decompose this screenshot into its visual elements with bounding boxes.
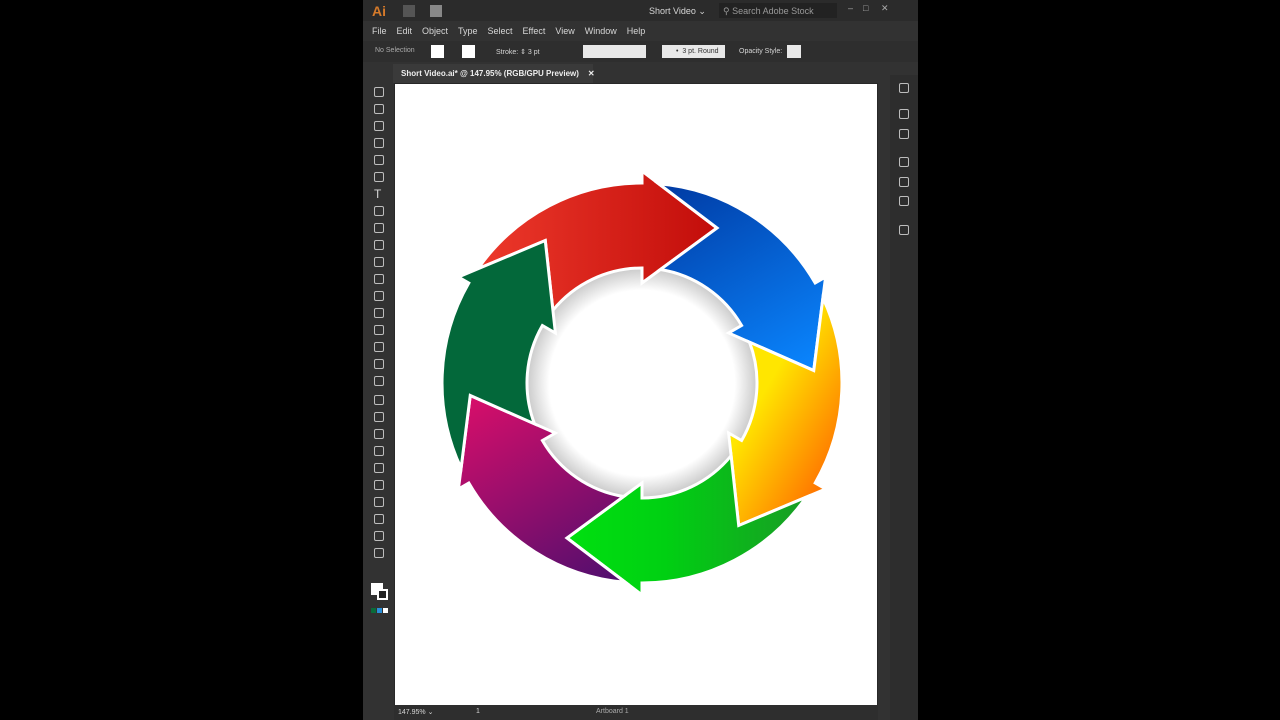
status bar	[394, 705, 878, 720]
artboard	[395, 84, 877, 705]
toolbar	[371, 87, 388, 613]
toolbar: T	[374, 187, 381, 201]
arrow: orange	[667, 277, 908, 554]
title bar	[363, 0, 918, 21]
title bar: Ai	[372, 3, 386, 19]
status bar: Artboard 1	[596, 708, 629, 715]
control bar: No Selection	[375, 47, 415, 54]
canvas area	[394, 83, 878, 705]
document tab	[393, 64, 593, 83]
title bar: ⚲ Search Adobe Stock	[723, 6, 814, 16]
arrow: green	[567, 456, 806, 595]
status bar: 147.95% ⌄	[398, 709, 433, 716]
document tab: Short Video.ai* @ 147.95% (RGB/GPU Preview) ✕	[401, 69, 595, 78]
title bar: Short Video ⌄	[649, 6, 706, 16]
control bar	[363, 41, 918, 62]
control bar: Stroke: ⇕ 3 pt	[496, 49, 540, 56]
arrow: red	[478, 171, 717, 310]
inner white circle	[526, 267, 758, 499]
menu bar: File Edit Object Type Select Effect View Window Help	[372, 26, 645, 36]
status bar: 1	[476, 708, 480, 715]
right panel	[890, 75, 918, 720]
arrow: dark green	[376, 212, 617, 489]
app window	[363, 0, 918, 720]
title bar: – □ ✕	[848, 3, 888, 13]
arrow: blue	[623, 135, 863, 412]
control bar: • 3 pt. Round	[676, 48, 719, 55]
arrow: purple	[421, 354, 661, 631]
control bar: Opacity Style:	[739, 48, 782, 55]
